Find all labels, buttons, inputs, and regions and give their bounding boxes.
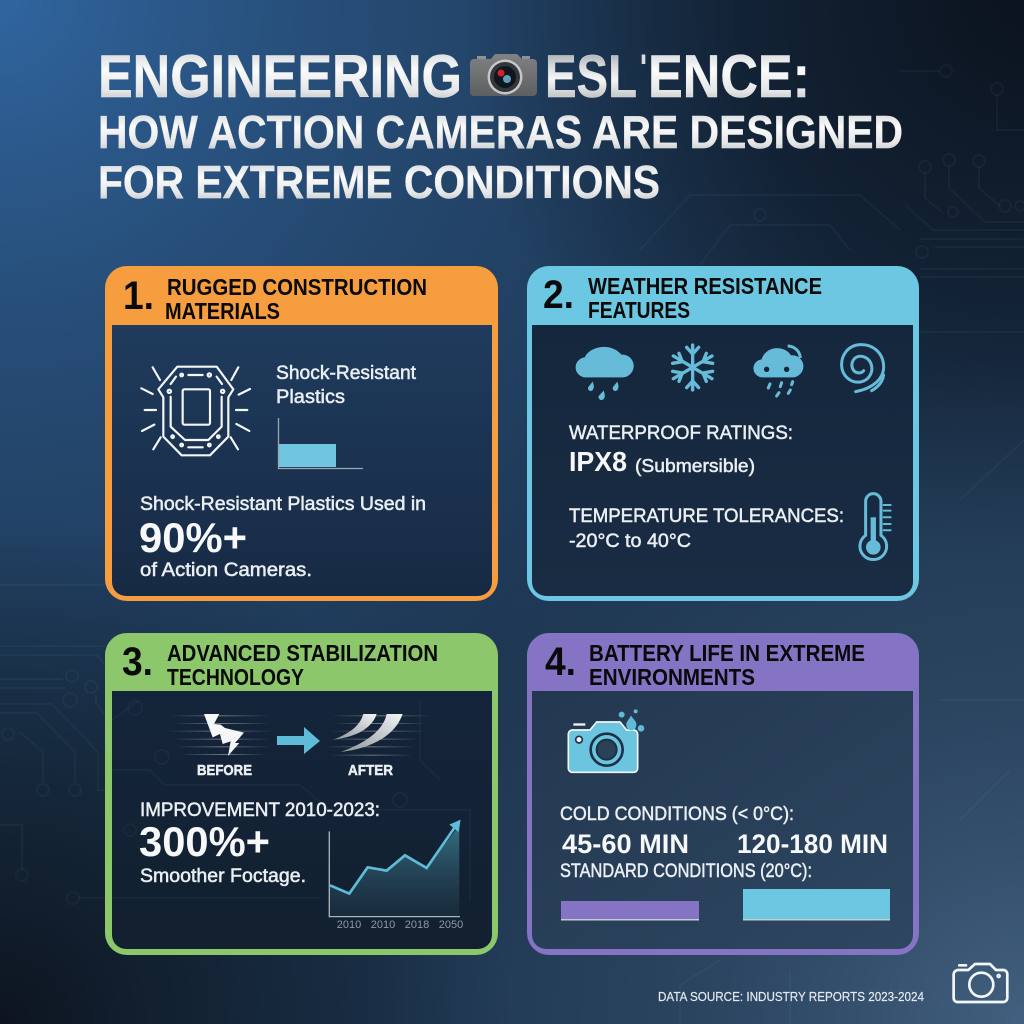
line chart: improvement bbox=[329, 820, 463, 931]
standard runtime value: 120-180 MIN bbox=[737, 829, 888, 859]
bar: cold runtime bbox=[561, 901, 699, 920]
panel 2 number: 2. bbox=[543, 273, 574, 317]
stat: 90 percent: 90%+ bbox=[139, 514, 247, 561]
cold runtime value: 45-60 MIN bbox=[562, 829, 689, 859]
label: shock-resistant plastics: Plastics bbox=[276, 387, 345, 408]
panel 1 heading: MATERIALS bbox=[165, 298, 280, 324]
icon: camera with droplets bbox=[568, 709, 644, 772]
stat: 90 percent: Shock-Resistant Plastics Used in bbox=[140, 494, 426, 515]
waterproof ratings text: WATERPROOF RATINGS: bbox=[569, 423, 793, 444]
panel 3 heading bbox=[167, 640, 438, 690]
label: before: BEFORE bbox=[197, 762, 252, 779]
cold conditions label: COLD CONDITIONS (< 0°C): bbox=[560, 804, 794, 825]
panel: weather resistance features bbox=[527, 266, 919, 601]
arrow: before to after bbox=[277, 727, 320, 754]
label: after: AFTER bbox=[348, 762, 393, 779]
icon: rain cloud bbox=[576, 347, 634, 400]
line chart: improvement: 2010 bbox=[337, 919, 361, 931]
label: shock-resistant plastics bbox=[276, 363, 417, 408]
panel 3 heading: TECHNOLOGY bbox=[167, 664, 304, 690]
panel 4 heading bbox=[589, 640, 865, 690]
title word: resilience: ESL bbox=[545, 43, 637, 110]
stat: 300 percent bbox=[139, 800, 380, 887]
panel 4 number: 4. bbox=[545, 640, 576, 684]
panel 2 heading bbox=[588, 273, 822, 323]
icon: title camera bbox=[470, 54, 537, 96]
panel 2 heading: FEATURES bbox=[588, 297, 690, 323]
stat: 90 percent: of Action Cameras. bbox=[140, 560, 312, 581]
icon: snowflake bbox=[673, 345, 713, 390]
line chart: improvement: 2050 bbox=[439, 919, 463, 931]
line chart: improvement: 2018 bbox=[405, 919, 429, 931]
title word: resilience bbox=[545, 43, 810, 110]
panel: battery life in extreme environments bbox=[527, 633, 919, 955]
waterproof ratings text: IPX8 bbox=[569, 446, 627, 477]
icon: wind spiral bbox=[842, 345, 884, 392]
temperature tolerances text: -20°C to 40°C bbox=[569, 531, 691, 552]
title: HOW ACTION CAMERAS ARE DESIGNED bbox=[98, 106, 903, 158]
title: ENGINEERING bbox=[98, 43, 462, 110]
stat: 90 percent bbox=[139, 494, 426, 581]
waterproof ratings text: (Submersible) bbox=[635, 456, 755, 476]
icon: shaky footage before bbox=[167, 714, 273, 756]
stat: 300 percent: 300%+ bbox=[139, 818, 270, 865]
temperature tolerances text bbox=[569, 506, 844, 552]
panel 4 heading: BATTERY LIFE IN EXTREME bbox=[589, 640, 865, 666]
icon: storm cloud bbox=[753, 346, 803, 396]
stat: 300 percent: Smoother Foctage. bbox=[140, 866, 306, 887]
stat: 300 percent: IMPROVEMENT 2010-2023: bbox=[140, 800, 380, 821]
data source footer: DATA SOURCE: INDUSTRY REPORTS 2023-2024 bbox=[658, 990, 924, 1004]
icon: rugged camera shell bbox=[141, 367, 250, 455]
panel 1 heading: RUGGED CONSTRUCTION bbox=[167, 274, 427, 300]
panel: advanced stabilization technology bbox=[105, 633, 498, 955]
title word: resilience: I bbox=[640, 51, 647, 67]
label: shock-resistant plastics: Shock-Resistant bbox=[276, 363, 417, 384]
temperature tolerances text: TEMPERATURE TOLERANCES: bbox=[569, 506, 844, 527]
icon: footer camera bbox=[954, 964, 1007, 1002]
panel 3 number: 3. bbox=[122, 640, 153, 684]
panel 4 heading: ENVIRONMENTS bbox=[589, 664, 755, 690]
title bbox=[98, 43, 903, 208]
title word: resilience: ENCE: bbox=[648, 43, 810, 110]
panel 3 heading: ADVANCED STABILIZATION bbox=[167, 640, 438, 666]
bar: standard runtime bbox=[743, 889, 890, 920]
bar chart: plastics bbox=[278, 418, 363, 468]
panel 1 heading bbox=[165, 274, 427, 324]
panel: rugged construction materials bbox=[105, 266, 498, 601]
panel 1 number: 1. bbox=[123, 274, 154, 318]
line chart: improvement: 2010 bbox=[371, 919, 395, 931]
panel 2 heading: WEATHER RESISTANCE bbox=[588, 273, 822, 299]
icon: thermometer bbox=[860, 494, 891, 560]
standard conditions label: STANDARD CONDITIONS (20°C): bbox=[560, 861, 812, 882]
icon: smooth footage after bbox=[323, 714, 433, 756]
title: FOR EXTREME CONDITIONS bbox=[98, 156, 660, 208]
waterproof ratings text bbox=[569, 423, 793, 477]
